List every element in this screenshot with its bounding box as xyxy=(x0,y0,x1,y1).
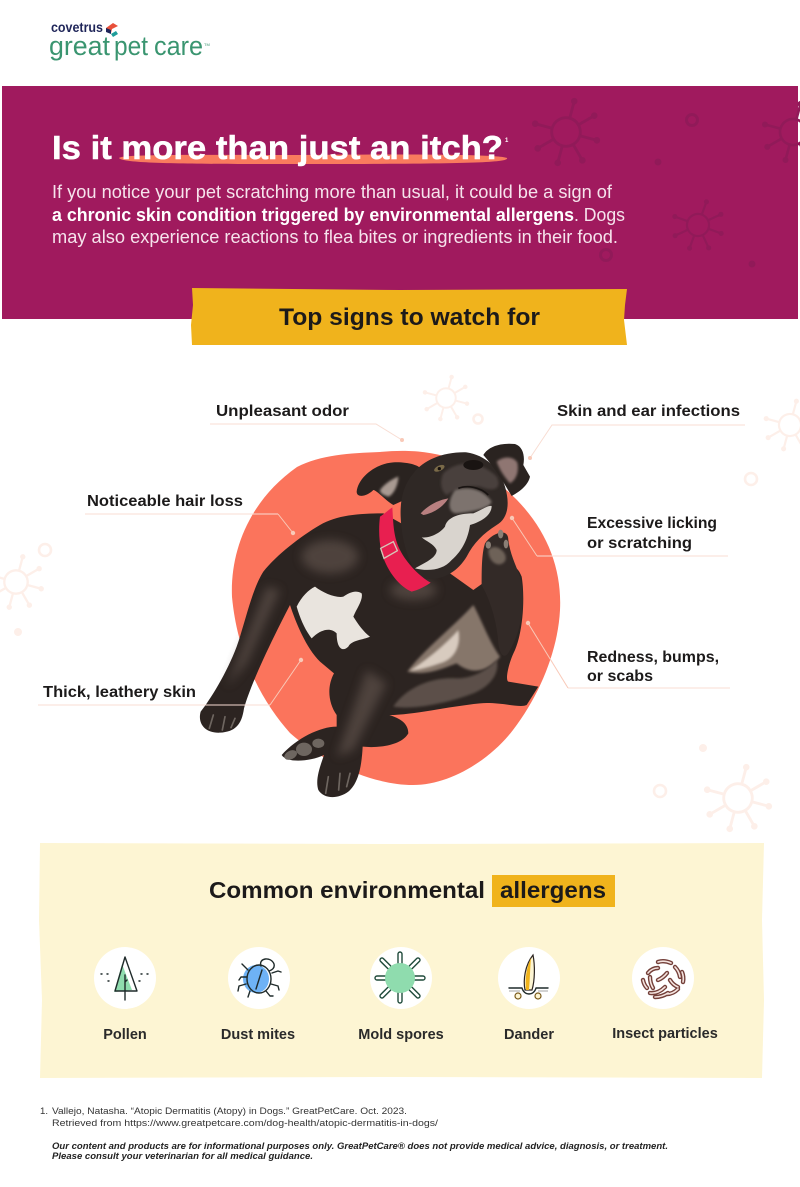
intro paragraph: . Dogs xyxy=(574,204,625,225)
callout: redness, bumps, or scabs: or scabs xyxy=(587,668,653,685)
disclaimer xyxy=(52,1141,668,1162)
callout: thick, leathery skin xyxy=(38,658,303,705)
panel: intro banner xyxy=(2,86,800,319)
face details xyxy=(433,464,446,473)
allergens heading: allergens xyxy=(500,877,606,903)
logo: care xyxy=(154,31,203,61)
logo: TM xyxy=(204,42,210,47)
callout: skin and ear infections xyxy=(528,403,745,460)
hind leg raised xyxy=(482,533,523,656)
tongue xyxy=(421,498,448,515)
callout: redness, bumps, or scabs: Redness, bumps, xyxy=(587,649,719,666)
logo: pet xyxy=(114,31,148,61)
allergen: mold spores: Mold spores xyxy=(358,1027,444,1043)
footnote: Retrieved from https://www.greatpetcare.com/dog-health/atopic-dermatitis-in-dogs/ xyxy=(52,1118,438,1129)
head xyxy=(401,452,508,579)
callout: noticeable hair loss xyxy=(85,493,295,535)
allergen: insect particles: Insect particles xyxy=(612,1026,718,1042)
allergen: dust mites xyxy=(221,947,295,1043)
callout: redness, bumps, or scabs xyxy=(526,621,730,688)
callout: unpleasant odor: Unpleasant odor xyxy=(216,403,349,420)
allergen: pollen xyxy=(94,947,156,1043)
callout: thick, leathery skin: Thick, leathery skin xyxy=(43,684,196,701)
title: Is it more than just an itch? xyxy=(52,129,503,166)
banner: top signs heading xyxy=(191,288,627,345)
intro paragraph xyxy=(52,181,625,247)
footnote: Vallejo, Natasha. “Atopic Dermatitis (Atopy) in Dogs.” GreatPetCare. Oct. 2023. xyxy=(52,1106,407,1117)
callout: unpleasant odor xyxy=(210,403,404,442)
paw pads and toes xyxy=(283,739,324,762)
left ear xyxy=(357,462,422,505)
footnote: 1. xyxy=(40,1106,48,1117)
callout: excessive licking or scratching: or scratching xyxy=(587,535,692,552)
callout: noticeable hair loss: Noticeable hair loss xyxy=(87,493,243,510)
title underline xyxy=(119,154,507,164)
decorative viruses on white xyxy=(0,369,800,841)
logo: great xyxy=(49,31,110,61)
belly xyxy=(407,605,500,673)
chest patch xyxy=(297,587,370,649)
callout: skin and ear infections: Skin and ear infections xyxy=(557,403,740,420)
allergens heading: Common environmental xyxy=(209,877,485,903)
callout: excessive licking or scratching xyxy=(510,515,728,556)
logo xyxy=(49,20,210,61)
allergen: mold spores xyxy=(358,947,444,1043)
decorative viruses on banner xyxy=(523,89,800,267)
banner: top signs heading: Top signs to watch for xyxy=(279,304,540,331)
intro paragraph: a chronic skin condition triggered by environmental allergens xyxy=(52,204,574,225)
panel: common environmental allergens xyxy=(39,843,764,1078)
footnote xyxy=(40,1106,438,1129)
allergen: dander: Dander xyxy=(504,1027,554,1043)
right ear xyxy=(483,444,530,496)
allergens heading xyxy=(209,875,615,907)
panel: intro banner: 1 xyxy=(505,138,509,144)
chin and neck patch xyxy=(450,488,492,513)
fur highlights xyxy=(227,540,437,757)
allergen: pollen: Pollen xyxy=(103,1027,147,1043)
coral blob behind dog xyxy=(232,451,560,785)
allergen: dander xyxy=(498,947,560,1043)
intro paragraph: If you notice your pet scratching more than usual, it could be a sign of xyxy=(52,181,613,202)
intro paragraph: may also experience reactions to flea bites or ingredients in their food. xyxy=(52,226,618,247)
allergen: dust mites: Dust mites xyxy=(221,1027,295,1043)
illustration: scratching dog xyxy=(200,444,538,797)
disclaimer: Please consult your veterinarian for all medical guidance. xyxy=(52,1151,313,1162)
dog body xyxy=(200,513,538,797)
disclaimer: Our content and products are for informational purposes only. GreatPetCare® does not provide medical advice, diagnosis, or treatment. xyxy=(52,1141,668,1152)
collar xyxy=(379,507,431,592)
logo: covetrus xyxy=(51,20,103,35)
allergen: insect particles xyxy=(612,947,718,1042)
callout: excessive licking or scratching: Excessive licking xyxy=(587,515,717,532)
